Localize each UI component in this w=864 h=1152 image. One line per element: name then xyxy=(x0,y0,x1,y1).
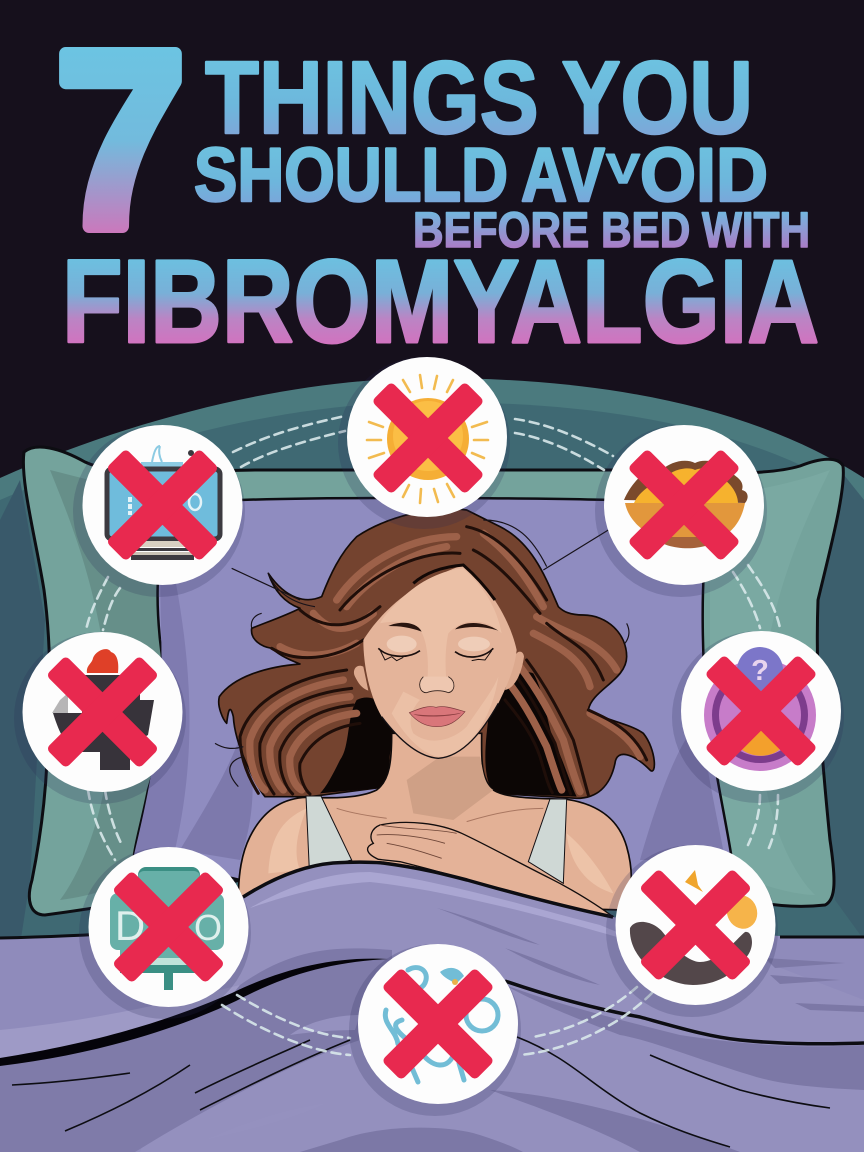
road sign xyxy=(110,867,224,990)
onion rings and question bubble xyxy=(704,647,816,771)
neck and shoulders xyxy=(238,733,631,910)
woman sleeping xyxy=(215,509,654,918)
bedding xyxy=(0,862,864,1152)
title line: SHOULLD AVVOID xyxy=(194,133,768,218)
bed sheet xyxy=(0,897,864,1152)
icon: no heavy food xyxy=(595,425,767,597)
road sign: D xyxy=(115,902,145,949)
title line: SHOULLD AVVOID: V xyxy=(606,145,640,192)
icon: no to-do sign xyxy=(79,847,251,1019)
dark cups xyxy=(52,649,154,770)
tank straps xyxy=(306,796,567,883)
sun xyxy=(367,375,488,503)
onion rings and question bubble: ? xyxy=(751,655,769,687)
blanket folds xyxy=(0,985,240,1058)
title line: SHOULLD AVVOID: AV xyxy=(521,133,605,218)
nose xyxy=(420,677,454,693)
icon: no sunlight xyxy=(338,357,510,529)
hair xyxy=(215,509,654,798)
icon: no rich snacks xyxy=(606,845,778,1017)
swirls xyxy=(385,968,498,1082)
headboard xyxy=(0,378,864,960)
icon: no screens xyxy=(73,425,245,597)
hair highlights xyxy=(250,533,640,792)
hair dark strands xyxy=(240,527,647,795)
forehead hairline shadow xyxy=(413,565,495,600)
road sign: O xyxy=(194,907,222,948)
face xyxy=(363,565,517,758)
hair flyaways xyxy=(215,520,629,787)
blanket crease lines xyxy=(0,959,388,1066)
resting arm and hand xyxy=(368,822,615,918)
title line: SHOULLD AVVOID: OID xyxy=(640,133,768,218)
lips xyxy=(409,707,465,727)
face light xyxy=(380,568,502,757)
icon: no worries xyxy=(672,631,844,803)
title line: SHOULLD AVVOID: SHOULLD xyxy=(194,133,508,218)
dashed connectors xyxy=(86,416,780,1055)
closed eyes xyxy=(378,636,493,661)
icon: no restless mind xyxy=(349,944,521,1116)
hair shadows xyxy=(320,672,577,797)
bed scene xyxy=(0,378,864,960)
title line: THINGS YOU: THINGS YOU xyxy=(205,40,753,155)
blanket xyxy=(140,862,864,1152)
green pillow xyxy=(23,447,843,915)
dark bowl and sweet xyxy=(630,870,762,985)
ears xyxy=(354,652,524,691)
eyebrows xyxy=(388,623,498,632)
monitor xyxy=(107,446,220,560)
basket of food xyxy=(624,461,748,548)
icon: no late drinks xyxy=(14,632,186,804)
purple pillow xyxy=(134,498,732,880)
shoulder light shading xyxy=(268,808,613,893)
title numeral 7: 7 xyxy=(56,0,186,279)
title xyxy=(56,0,819,368)
